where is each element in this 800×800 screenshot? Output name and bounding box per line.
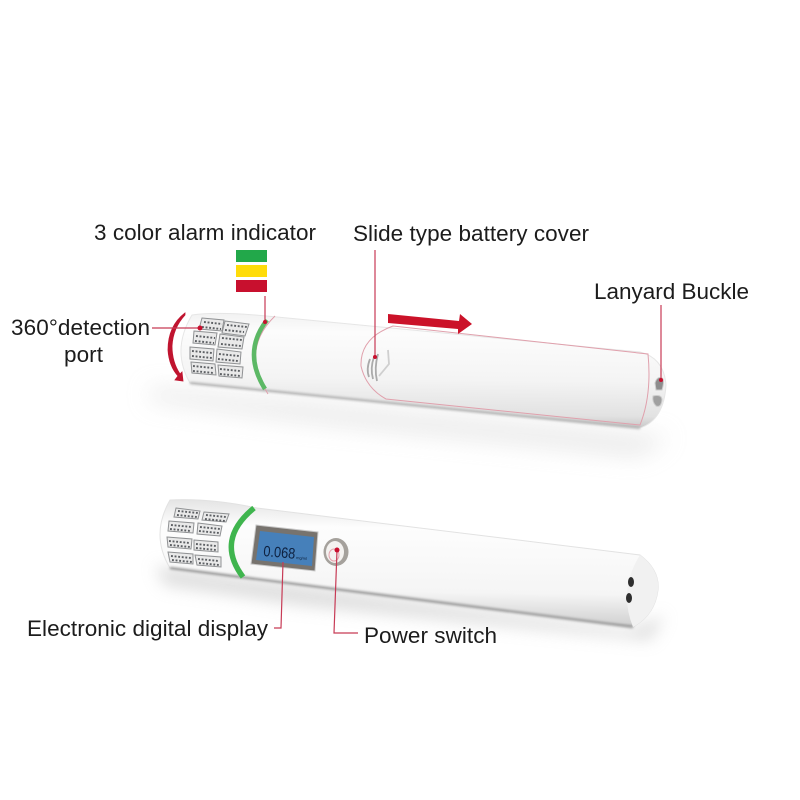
port grid: bottom device bbox=[167, 508, 229, 567]
callout: battery cover leader bbox=[373, 250, 377, 359]
green indicator ring: bottom device bbox=[231, 508, 254, 577]
label: 360 detection port: port bbox=[64, 342, 104, 367]
digital display bbox=[251, 525, 318, 571]
icon: slide chevrons on cover bbox=[368, 350, 389, 381]
callout: lanyard leader bbox=[659, 305, 663, 382]
callout: detection port leader bbox=[152, 326, 202, 330]
shadow: bottom device bbox=[155, 566, 665, 640]
alarm colour bars bbox=[236, 250, 267, 292]
port grid: top device bbox=[190, 318, 249, 378]
display unit: mg/ml bbox=[296, 555, 307, 561]
callout: power switch leader bbox=[334, 548, 358, 633]
label: 360 detection port: 360°detection bbox=[11, 315, 150, 340]
lanyard buckle holes bbox=[653, 378, 664, 406]
callout: display leader bbox=[274, 562, 283, 628]
display bezel bbox=[251, 525, 318, 571]
display screen bbox=[256, 531, 314, 566]
display reading: 0.068 bbox=[263, 543, 296, 563]
label: electronic digital display: Electronic digital display bbox=[27, 616, 269, 641]
shadow: top device bbox=[150, 388, 670, 455]
label: lanyard buckle: Lanyard Buckle bbox=[594, 279, 749, 304]
label: power switch: Power switch bbox=[364, 623, 497, 648]
device body: bottom bbox=[160, 500, 658, 627]
label: 360 detection port bbox=[11, 315, 150, 367]
battery cover outline bbox=[361, 326, 649, 425]
arrow: rotation around detection port bbox=[168, 313, 185, 381]
green indicator ring: top device bbox=[254, 316, 275, 394]
panel: bottom device, front view bbox=[155, 500, 665, 640]
bottom edge shading: top device bbox=[190, 383, 640, 428]
speaker holes bbox=[626, 577, 634, 603]
power button bbox=[324, 538, 348, 566]
device end cap bbox=[627, 555, 658, 627]
callout: alarm indicator leader bbox=[263, 296, 267, 324]
device body: top bbox=[181, 313, 666, 428]
panel: top device, back view bbox=[150, 313, 670, 455]
arrow: slide direction bbox=[388, 314, 472, 334]
label: slide type battery cover: Slide type battery cover bbox=[353, 221, 590, 246]
bottom edge shading: bottom device bbox=[170, 568, 633, 627]
label: 3 color alarm indicator: 3 color alarm indicator bbox=[94, 220, 316, 245]
